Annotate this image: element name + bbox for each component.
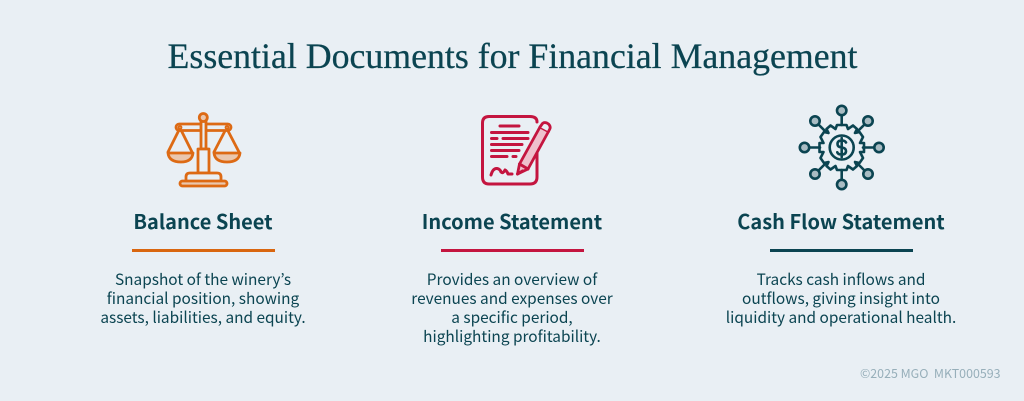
rule: Income Statement: [441, 249, 584, 252]
heading: Balance Sheet: Balance Sheet: [133, 206, 273, 235]
text: Income Statement description: Provides an overview of: [427, 268, 597, 290]
text: Income Statement description: [411, 268, 613, 347]
text: Cash Flow Statement description: [726, 268, 956, 328]
text: Cash Flow Statement description: liquidity and operational health.: [726, 306, 956, 328]
text: Balance Sheet description: [100, 268, 306, 328]
text: Cash Flow Statement description: Tracks cash inflows and: [757, 268, 925, 290]
copyright note: ©2025 MGO MKT000593: [860, 364, 1000, 382]
rule: Balance Sheet: [132, 249, 275, 252]
rule: Cash Flow Statement: [770, 249, 913, 252]
icon: gear with dollar and network nodes: [798, 104, 885, 190]
title: Essential Documents for Financial Management: [168, 36, 857, 76]
text: Cash Flow Statement description: outflows, giving insight into: [742, 287, 940, 309]
text: Balance Sheet description: assets, liabilities, and equity.: [100, 306, 306, 328]
text: Income Statement description: highlighting profitability.: [423, 325, 601, 347]
text: Income Statement description: revenues and expenses over: [411, 287, 613, 309]
heading: Cash Flow Statement: Cash Flow Statement: [737, 206, 945, 235]
text: Income Statement description: a specific period,: [451, 306, 573, 328]
text: Balance Sheet description: Snapshot of the winery’s: [115, 268, 291, 290]
heading: Income Statement: Income Statement: [422, 206, 602, 235]
icon: balance scales: [166, 112, 242, 188]
icon: document and pen: [481, 115, 552, 186]
text: Balance Sheet description: financial position, showing: [107, 287, 299, 309]
